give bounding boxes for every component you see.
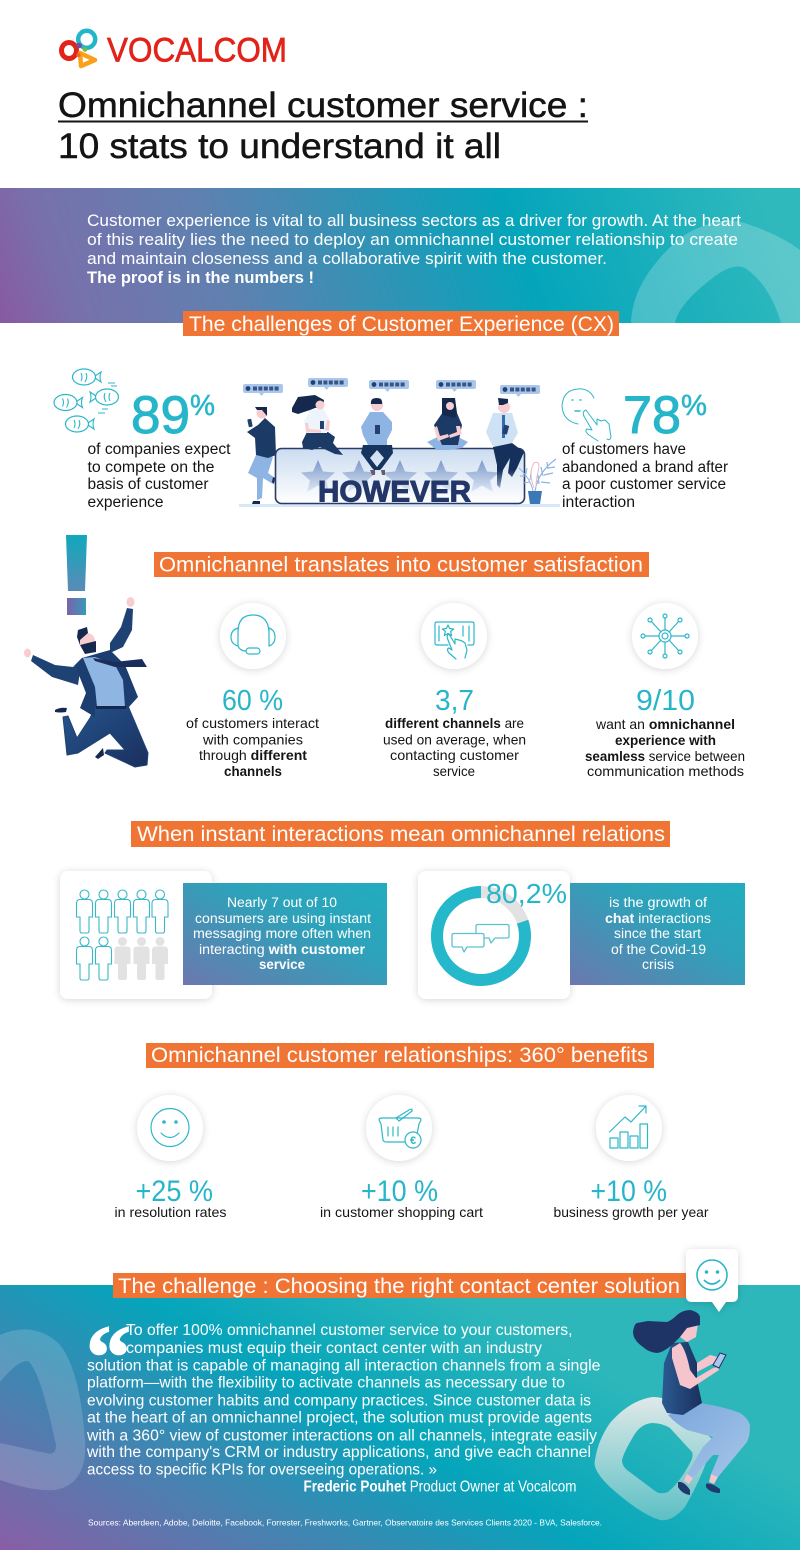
intro text [87,212,741,287]
text: 9/10 description [585,716,745,779]
icon: basket with euro [366,1095,432,1161]
jacket [75,650,138,717]
rating bubbles [243,378,540,397]
benefit: shopping cart [320,1095,483,1220]
text: 9/10 description: want an omnichannel [595,716,735,732]
shoes [678,1482,720,1495]
icon: headset [220,603,286,669]
title: Omnichannel customer service : [58,86,588,125]
value 80,2%: 80,2% [486,878,567,909]
far arm [697,1355,718,1372]
quote text: Frederic Pouhet Product Owner at Vocalcom [304,1478,576,1496]
caption: 89% of companies: to compete on the [88,459,214,476]
illustration: jumping businessman [24,597,148,767]
icon: smiley speech bubble [686,1249,738,1312]
panel: chat growth text: crisis [642,957,674,972]
logo: Vocalcom: VOCALCOM [107,32,287,70]
caption: 78% of customers: abandoned a brand after [562,459,728,476]
heading: the challenge: The challenge : Choosing the right contact center solution [118,1275,680,1298]
panel: 7 out of 10 text: Nearly 7 out of 10 [227,895,337,910]
card: 80,2% chat growth [418,871,570,999]
illustration: people sitting on HOWEVER board [239,378,560,508]
quote text: at the heart of an omnichannel project, the solution must provide agents [87,1410,592,1426]
caption: 78% of customers: interaction [562,494,635,511]
icon: tablet with star and hand [421,603,487,669]
title [58,86,588,166]
text: 60% description: of customers interact [186,715,319,731]
text: 60% description: channels [224,763,282,779]
text: 3,7 description: service [433,763,475,779]
caption: 89% of companies: basis of customer [88,476,208,493]
panel: chat growth text: chat interactions [605,911,711,926]
panel: 7 out of 10 text: consumers are using instant [195,911,371,926]
heading: instant interactions: When instant interactions mean omnichannel relations [137,823,665,846]
quote text: To offer 100% omnichannel customer service to your customers, [126,1322,572,1339]
illustration: woman sitting on ring with phone [595,1310,750,1520]
icon: chat bubbles [452,924,509,952]
sources: Sources: Aberdeen, Adobe, Deloitte, Facebook, Forrester, Freshworks, Gartner, Observatoire des Services Clients 2020 - BVA, Salesforce. [88,1518,602,1528]
legs [63,706,148,767]
benefit: resolution rates: in resolution rates [114,1204,226,1220]
text: 3,7 description: used on average, when [383,732,526,748]
caption: 89% of companies [88,441,231,511]
caption: 78% of customers: of customers have [562,441,686,458]
heading: 360 benefits: Omnichannel customer relationships: 360° benefits [151,1044,648,1067]
quote text: access to specific KPIs for overseeing operations. » [87,1462,437,1478]
icon: fish school [54,369,118,432]
quote text: evolving customer habits and company practices. Since customer data is [87,1392,591,1410]
face [680,1323,698,1342]
stat column: 60% [186,603,319,779]
stat: 89% [88,386,231,511]
person 4 sitting woman [427,398,468,450]
right arm [110,608,133,653]
stat column: 9/10: 9/10 [636,685,695,717]
text: 3,7 description: contacting customer [390,747,519,763]
torso [662,1342,702,1415]
quote text: with the company's CRM or industry applications, and give each channel [86,1444,591,1461]
person 5 sitting man [486,398,524,488]
caption: 89% of companies: experience [88,494,164,511]
stat column: 3,7 [383,603,526,779]
panel: chat growth text: of the Covid-19 [611,942,706,957]
title: 10 stats to understand it all [58,127,501,166]
benefit: business growth [554,1095,709,1220]
belt [96,706,126,709]
card: 7 out of 10 consumers [60,871,212,999]
shoes [55,708,104,759]
board with however: HOWEVER [318,476,471,508]
hair [633,1310,700,1353]
icon: sad face with hand [562,389,611,441]
person 2 sitting woman [292,395,343,455]
near arm [672,1343,719,1389]
benefit: resolution rates: +25 % [136,1175,213,1208]
heading: omnichannel translates into customer satisfaction: Omnichannel translates into customer satisfaction [159,554,643,576]
shirt [83,657,125,707]
caption: 78% of customers: a poor customer service [562,476,726,493]
person 1 standing [247,407,276,504]
stat: 78% [562,386,728,511]
benefit: resolution rates [114,1095,226,1220]
left arm [31,655,82,685]
text: 60% description [186,715,319,779]
benefit: business growth: business growth per year [554,1204,709,1220]
stat: 78%: % [681,390,707,422]
panel: 7 out of 10 text [183,883,387,985]
quote text: with a 360° view of customer interactions on all channels, integrate easily [86,1428,597,1444]
heading: the challenges of CX: The challenges of Customer Experience (CX) [189,313,614,336]
text: 9/10 description: communication methods [587,763,744,779]
text: 60% description: through different [199,747,307,763]
panel: chat growth text: is the growth of [609,895,707,910]
text: 9/10 description: seamless service between [585,748,745,764]
intro text: and maintain closeness and a collaborative spirit with the customer. [87,250,607,268]
icon grid: ten people, seven highlighted [76,890,168,980]
text: 9/10 description: experience with [615,732,716,748]
tie [93,658,147,667]
quote text: companies must equip their contact center with an industry [126,1340,542,1357]
panel: introduction band [0,188,800,323]
panel: chat growth text [570,883,745,985]
panel: 7 out of 10 text: service [259,957,305,972]
text: 3,7 description: different channels are [385,715,524,731]
stat column: 60%: 60 % [222,685,283,717]
stat: 89%: % [190,390,215,422]
text: 60% description: with companies [202,732,303,748]
icon: network hub [632,603,698,669]
text: 3,7 description [383,715,526,779]
panel: 7 out of 10 text: messaging more often when [193,926,371,941]
icon: smiley [137,1095,203,1161]
caption: 78% of customers [562,441,728,511]
board with however [276,448,524,508]
stat: 78%: 78 [623,386,681,445]
head [79,633,95,649]
benefit: shopping cart: in customer shopping cart [320,1204,483,1220]
intro text: The proof is in the numbers ! [87,269,314,287]
caption: 89% of companies: of companies expect [88,441,231,458]
panel: 7 out of 10 text: interacting with customer [199,942,366,957]
intro text: Customer experience is vital to all business sectors as a driver for growth. At the heart [87,212,741,230]
stat: 89%: 89 [131,386,190,445]
quote text [86,1322,600,1496]
person 3 sitting man [361,398,393,475]
legs [668,1403,750,1478]
quote text: platform—with the flexibility to activate channels as necessary due to [87,1374,565,1392]
potted plant [519,459,556,504]
stat column: 3,7: 3,7 [435,685,474,717]
phone [713,1353,726,1368]
icon: basket with euro: € [410,1135,416,1147]
hands [24,648,31,658]
quote text: solution that is capable of managing all interaction channels from a single [87,1358,600,1374]
ankles [684,1474,718,1484]
ring seat [595,1397,713,1520]
icon: exclamation mark [66,535,87,615]
stat column: 9/10 [585,603,745,779]
icon: growth chart [596,1095,662,1161]
panel: challenge quote band [0,1285,800,1550]
benefit: business growth: +10 % [590,1175,667,1208]
donut chart [437,892,525,980]
intro text: of this reality lies the need to deploy an omnichannel customer relationship to create [87,231,738,249]
benefit: shopping cart: +10 % [361,1175,438,1208]
quote mark: “ [86,1308,131,1407]
panel: chat growth text: since the start [614,926,701,941]
